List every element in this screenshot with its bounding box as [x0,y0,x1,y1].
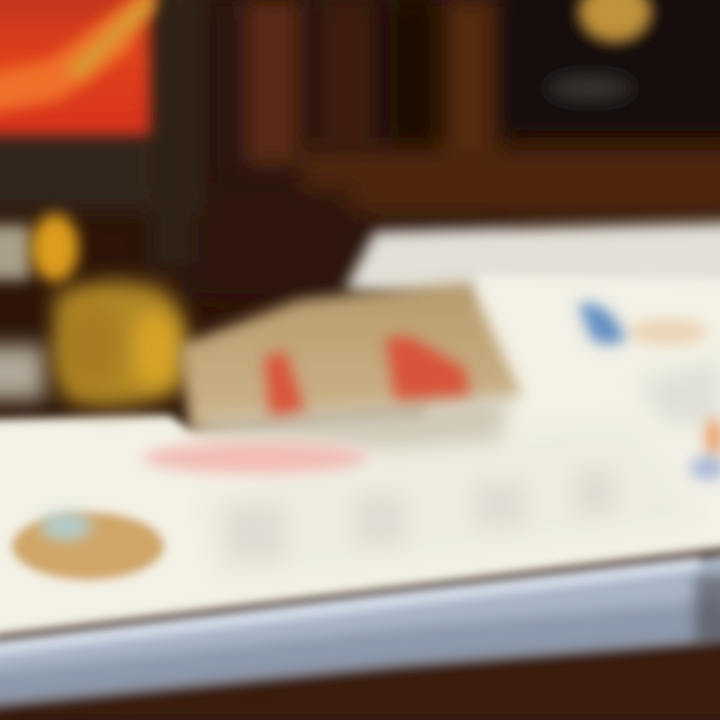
pie chart [12,512,164,580]
beige note card with red marks [180,282,522,448]
pink text smear [143,442,367,474]
table text smear on page [225,470,615,560]
dark panel with gold emblem [505,0,720,130]
left desk items [0,214,79,400]
gold cup [55,281,185,407]
wooden desk edge [0,642,720,720]
blue and peach chart marks [578,303,720,480]
book edge [0,550,720,710]
background: dark wooden shelves [180,0,720,300]
framed red poster [0,0,200,270]
white report pages [0,222,720,645]
